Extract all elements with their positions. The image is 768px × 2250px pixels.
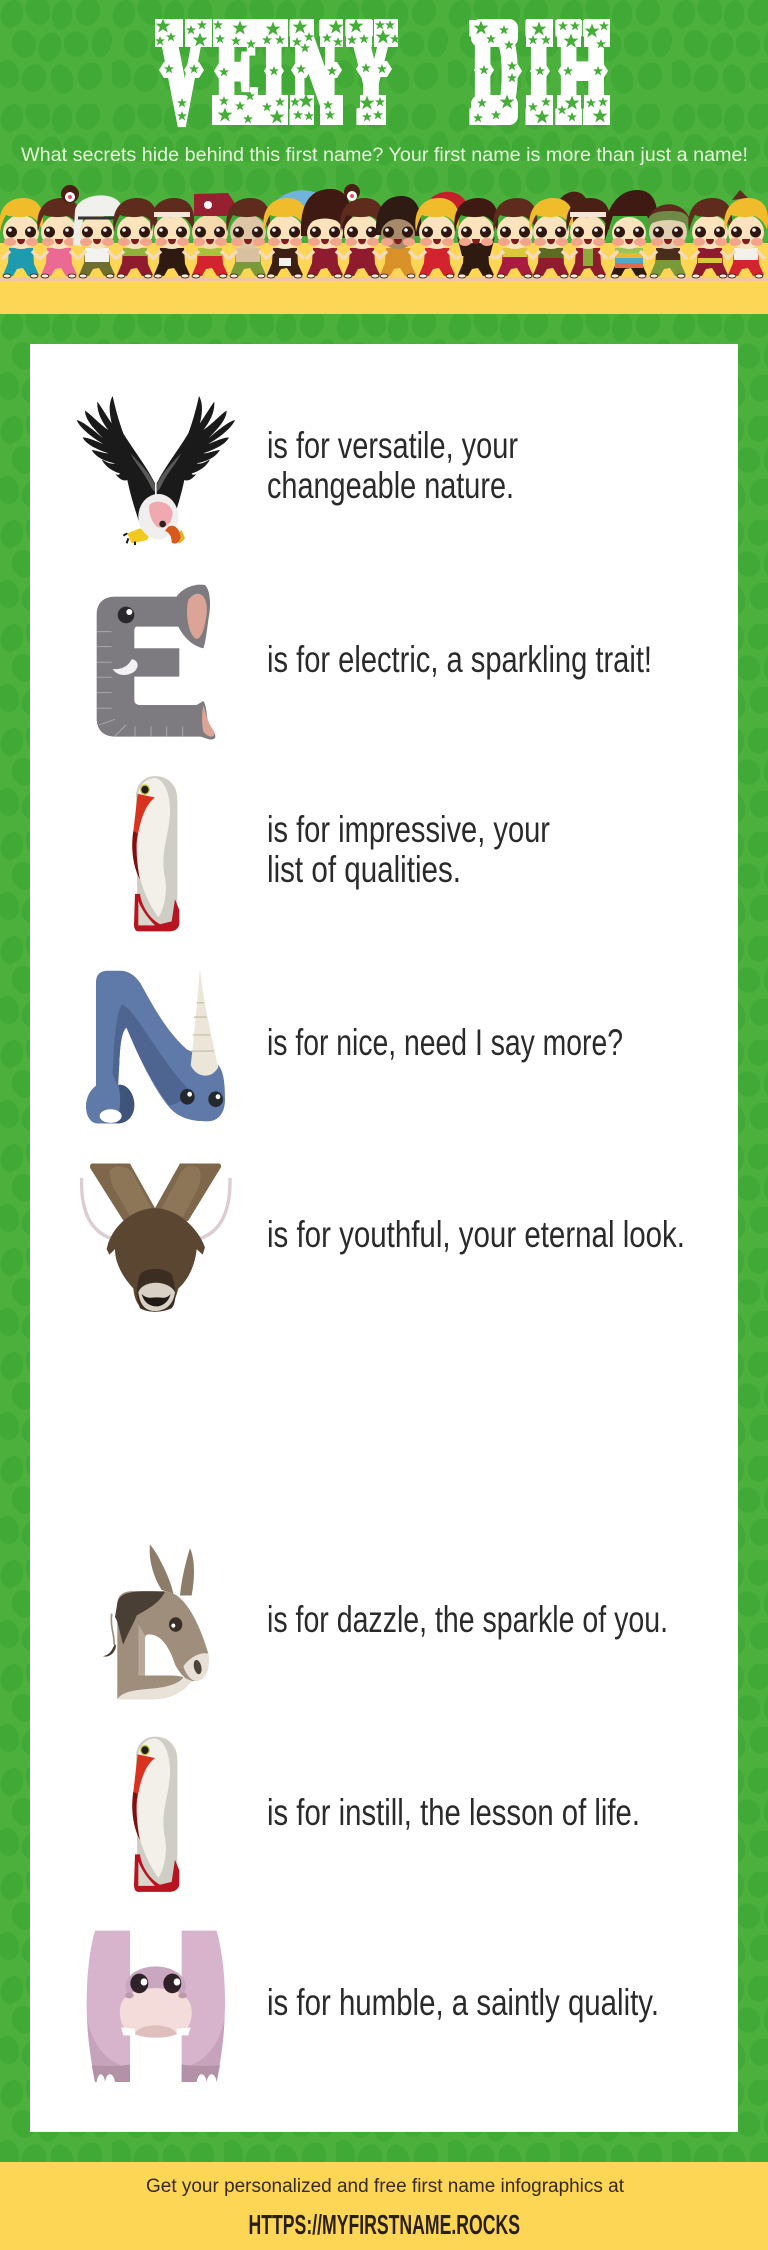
text: I: is for impressive, your (267, 809, 550, 850)
row: letter V (77, 396, 518, 545)
icon: hippo letter H (87, 1931, 225, 2082)
text: I second: is for instill, the lesson of life. (267, 1792, 640, 1833)
text: N: is for nice, need I say more? (267, 1022, 623, 1063)
child 2 (37, 185, 81, 278)
header (21, 0, 748, 166)
row: letter E (97, 585, 652, 739)
child 8 (263, 190, 320, 278)
text: I: list of qualities. (267, 849, 461, 890)
text: V: changeable nature. (267, 465, 514, 506)
text: H: is for humble, a saintly quality. (267, 1982, 659, 2023)
child 7 (226, 198, 270, 278)
text: V: is for versatile, your (267, 425, 518, 466)
child 6 (191, 193, 238, 278)
child 15 (529, 192, 589, 278)
subtitle: What secrets hide behind this first name? Your first name is more than just a name! (21, 144, 748, 166)
text: E: is for electric, a sparkling trait! (267, 639, 652, 680)
footer url: HTTPS://MYFIRSTNAME.ROCKS (248, 2209, 520, 2240)
child 20 (724, 190, 768, 278)
icon: stork letter I second (132, 1737, 179, 1892)
child 5 (150, 198, 194, 278)
child 19 (688, 198, 732, 278)
row: letter H (87, 1931, 659, 2082)
row: letter Y (82, 1164, 685, 1312)
child 12 (415, 192, 467, 278)
child 13 (454, 198, 498, 278)
title (155, 0, 610, 150)
icon: yak letter Y (82, 1164, 230, 1312)
footer text: Get your personalized and free first name infographics at (146, 2176, 625, 2197)
child 10 (340, 184, 384, 278)
footer (0, 2162, 768, 2250)
icon: narwhal letter N (86, 967, 225, 1124)
icon: donkey letter D (103, 1545, 209, 1699)
child 17 (605, 190, 657, 278)
child 11 (376, 196, 421, 278)
row: letter I (132, 776, 550, 931)
child 9 (301, 189, 352, 278)
child 4 (113, 198, 157, 278)
banner: yellow band with children in costumes (0, 184, 768, 314)
text: V (267, 425, 518, 506)
child 14 (493, 198, 537, 278)
child 16 (566, 198, 610, 278)
child 1 (0, 198, 43, 278)
panel: white letters panel (30, 344, 738, 2132)
child 3 (73, 195, 121, 278)
icon: elephant letter E (97, 585, 215, 739)
icon: stork letter I (132, 776, 179, 931)
icon: vulture letter V (77, 396, 235, 545)
row: letter I second (132, 1737, 640, 1892)
text: I (267, 809, 550, 890)
row: letter N (86, 967, 623, 1124)
row: letter D (103, 1545, 668, 1699)
child 18 (647, 204, 690, 278)
